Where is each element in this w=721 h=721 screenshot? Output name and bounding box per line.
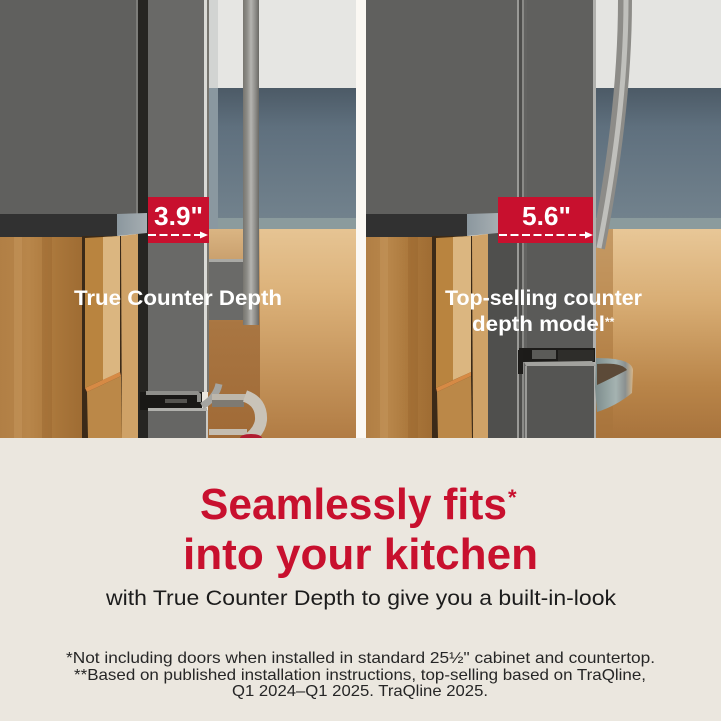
footnotes: **Based on published installation instructions, top-selling based on TraQline,: [74, 667, 646, 684]
subheading: with True Counter Depth to give you a built-in-look: [105, 586, 616, 610]
countertop: [366, 213, 498, 237]
panel: True Counter Depth photo: [0, 0, 356, 442]
lower handle: [209, 394, 262, 442]
countertop: [0, 213, 147, 237]
label: Top-selling counter depth model: depth model: [472, 313, 605, 336]
hinge: [518, 348, 596, 438]
measurement badge: 5.6 inches: 5.6": [522, 201, 571, 231]
fridge side: [488, 0, 596, 438]
footnotes: *Not including doors when installed in standard 25½" cabinet and countertop.: [66, 650, 655, 667]
footnotes: [66, 650, 655, 700]
backdrop: wall and cabinets: [208, 0, 356, 438]
measurement badge: 5.6 inches: [498, 197, 593, 243]
heading: [183, 480, 538, 579]
heading: Seamlessly fits: [200, 480, 507, 529]
footnotes: Q1 2024–Q1 2025. TraQline 2025.: [232, 683, 488, 700]
label: Top-selling counter depth model: [445, 287, 642, 336]
upper door: [366, 0, 595, 214]
lower curved handle: [595, 358, 633, 412]
heading: into your kitchen: [183, 530, 538, 579]
label: Top-selling counter depth model: Top-selling counter: [445, 287, 642, 310]
hinge: [140, 384, 219, 411]
fridge side: [136, 0, 209, 438]
curved handle: [598, 0, 626, 248]
panel: Top-selling counter depth photo: [366, 0, 721, 438]
measurement badge: 3.9 inches: 3.9": [154, 201, 203, 231]
backdrop: wall and cabinets: [596, 88, 721, 438]
label: Top-selling counter depth model: **: [605, 315, 615, 329]
gap between photos: [356, 0, 366, 438]
wood cabinets: [0, 234, 138, 438]
bar handle: [209, 0, 259, 325]
measurement badge: 3.9 inches: [148, 197, 209, 243]
heading: *: [508, 485, 517, 510]
label: True Counter Depth: True Counter Depth: [74, 287, 282, 310]
wood cabinets: [366, 234, 488, 438]
upper door: [0, 0, 136, 214]
